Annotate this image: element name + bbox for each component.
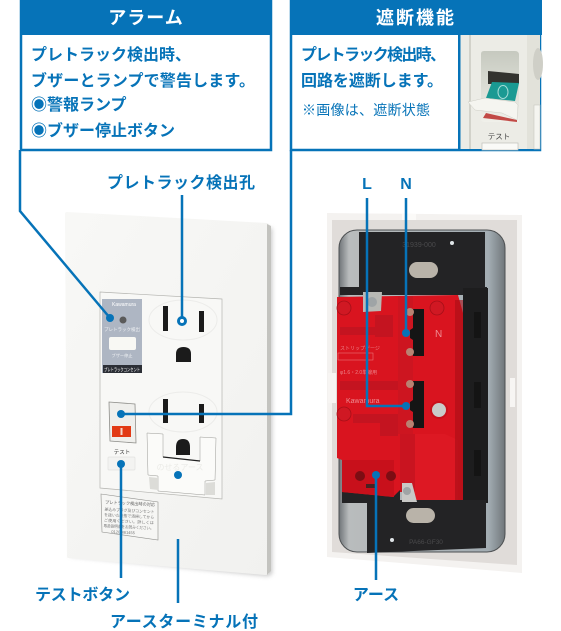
label: earth terminal: アースターミナル付	[110, 613, 258, 631]
alarm description: プレトラック検出時、	[31, 45, 191, 64]
heading: alarm: アラーム	[108, 8, 184, 28]
terminal slots	[410, 309, 424, 428]
photo: outlet back: 31939-000	[402, 242, 436, 249]
indicator label: プレトラックコンセント	[104, 368, 140, 374]
marker: earth terminal	[174, 471, 182, 603]
indicator label: Kawamura	[112, 302, 136, 308]
red terminal block: Kawamura	[346, 398, 380, 405]
black mounting base	[340, 232, 488, 553]
warning sticker	[101, 494, 158, 540]
warning sticker: 取扱説明書をお読みください。	[104, 522, 154, 531]
panel: breaker function	[290, 0, 543, 150]
leader lines	[20, 150, 291, 414]
red terminal block: N	[435, 329, 442, 340]
marker: plug detection hole	[178, 195, 186, 324]
marker: L terminal	[366, 198, 410, 410]
test button	[108, 449, 135, 470]
rivets	[337, 301, 444, 421]
heading: breaker function: 遮断機能	[376, 8, 456, 28]
alarm description: ◉警報ランプ	[31, 95, 127, 114]
indicator label	[102, 299, 142, 374]
warning sticker: を抜いた状態で清掃してから	[104, 511, 154, 520]
earth terminal	[147, 433, 216, 495]
label: earth: アース	[353, 587, 399, 604]
label: test button: テストボタン	[35, 586, 130, 604]
red terminal block: φ1.6・2.0単線用	[340, 369, 377, 376]
callouts: markers and leaders	[106, 195, 410, 603]
red terminal block	[337, 292, 463, 502]
indicator label: プレトラック検出	[104, 326, 140, 333]
label: L: L	[362, 176, 372, 193]
breaker description: プレトラック検出時、	[301, 45, 446, 64]
breaker description	[301, 45, 446, 118]
photo: tripped breaker: テスト	[488, 132, 510, 141]
warning sticker: ご使用ください。詳しくは	[104, 517, 154, 525]
warning sticker: 差込みプラグ及びコンセント	[104, 506, 155, 514]
lower socket	[149, 392, 217, 455]
label: N: N	[400, 176, 412, 193]
marker: test button	[117, 460, 125, 578]
alarm description	[31, 45, 255, 140]
red terminal block: ストリップゲージ	[340, 345, 380, 352]
alarm description: ブザーとランプで警告します。	[31, 71, 255, 90]
outlet inner face	[100, 292, 222, 499]
earth terminal: のせるアース	[156, 463, 204, 472]
breaker description: ※画像は、遮断状態	[302, 102, 430, 118]
marker: alarm lamp	[106, 314, 114, 322]
photo: tripped breaker	[458, 35, 543, 150]
label: plug detection hole: プレトラック検出孔	[107, 173, 255, 192]
photo: outlet front	[65, 212, 272, 576]
photo: outlet back	[327, 213, 522, 573]
upper socket	[149, 300, 217, 362]
breaker description: 回路を遮断します。	[301, 71, 443, 90]
panel: alarm	[20, 0, 272, 150]
marker: breaker	[117, 410, 125, 418]
photo: outlet back: PA66-GF30	[409, 539, 443, 546]
marker: N terminal	[402, 198, 410, 337]
side tabs	[328, 373, 515, 407]
indicator label: ブザー停止	[112, 352, 132, 359]
marker: back earth	[372, 471, 380, 580]
alarm description: ◉ブザー停止ボタン	[31, 121, 175, 140]
warning sticker: プレトラック検出時の対応	[105, 499, 156, 508]
warning sticker: 0120-461455	[111, 529, 136, 535]
metal frame	[339, 230, 505, 552]
breaker button	[109, 402, 136, 443]
test button: テスト	[114, 449, 130, 456]
